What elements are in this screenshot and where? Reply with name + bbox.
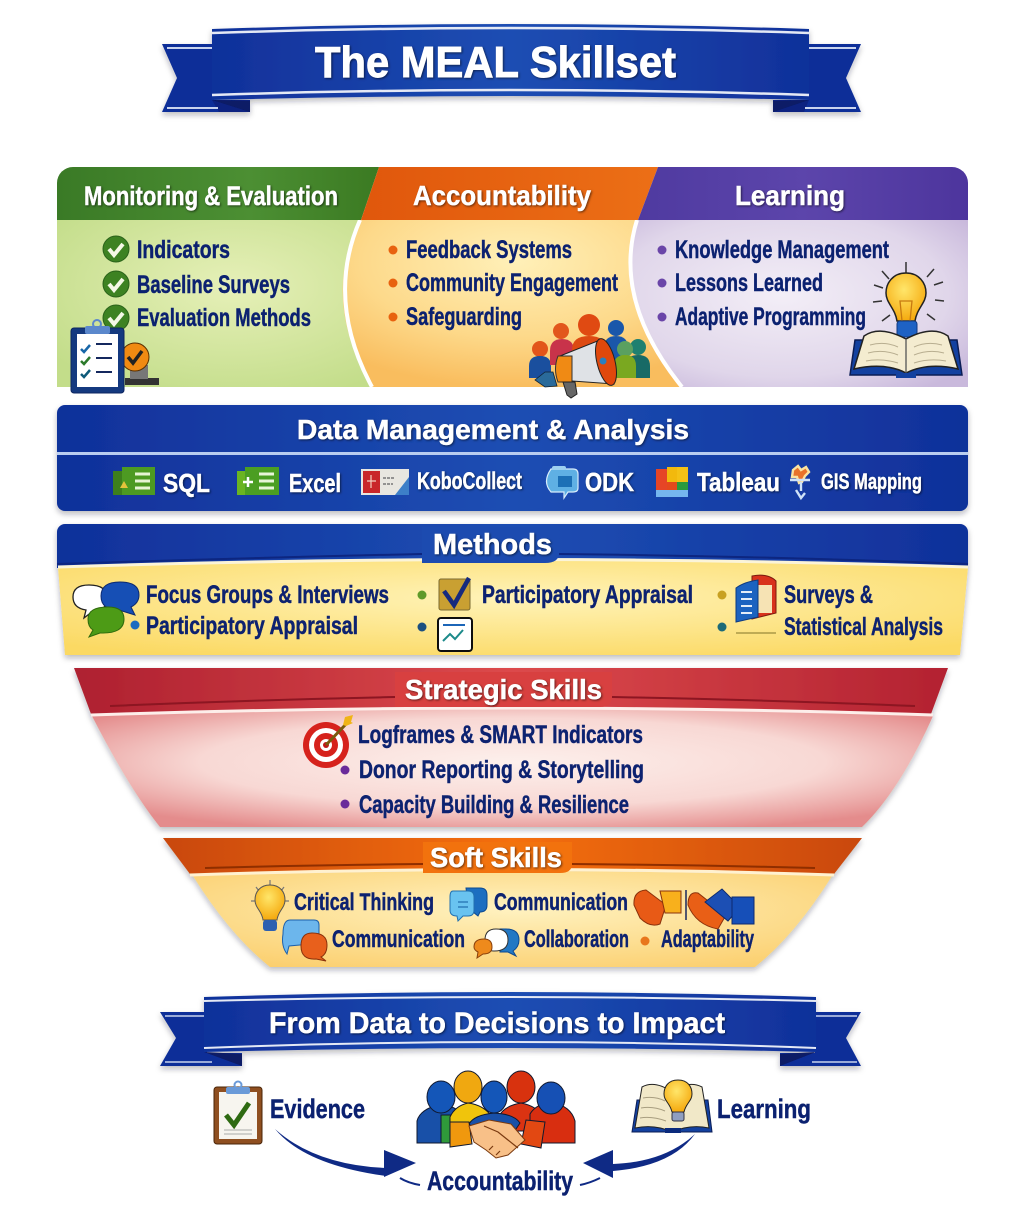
list: soft skills row two: Adaptability (661, 926, 754, 953)
list: soft skills row one: Communication (494, 889, 628, 916)
icon: Tableau blocks (656, 467, 688, 497)
list: soft skills row two (332, 926, 754, 953)
list: methods left: Participatory Appraisal (146, 612, 358, 640)
list: strategic skills: Capacity Building & Resilience (359, 791, 629, 819)
list: methods middle: Participatory Appraisal (482, 581, 693, 609)
list: strategic skills: Donor Reporting & Storytelling (359, 756, 644, 784)
icon: comment bubbles (282, 920, 327, 961)
icon: checkmark tile (439, 578, 470, 610)
icon: evidence clipboard (214, 1082, 262, 1144)
icon: statistics ledger (736, 575, 776, 633)
heading: Learning: Learning (735, 180, 845, 211)
icon: ODK speech case (546, 466, 578, 498)
label: GIS Mapping: GIS Mapping (821, 469, 922, 494)
label: KoboCollect: KoboCollect (417, 468, 522, 495)
icon: light bulb over open book (850, 262, 962, 378)
heading tab: Methods: Methods (433, 529, 552, 561)
icon: crowd with megaphone (529, 314, 650, 398)
icon: book and bulb (632, 1080, 712, 1133)
label: Learning: Learning (717, 1094, 811, 1124)
list: methods right (718, 581, 943, 641)
header: green (57, 167, 379, 220)
banner right tail (773, 44, 861, 112)
list: monitoring items: Indicators (137, 236, 230, 264)
icon: blue and orange handshake (686, 889, 754, 929)
list: learning items (658, 236, 889, 331)
label: ODK: ODK (585, 467, 634, 497)
list: methods middle (418, 581, 693, 632)
header: orange (361, 167, 658, 220)
list: soft skills row one (294, 889, 628, 916)
title banner (162, 24, 861, 112)
panel: MEAL pillars (57, 167, 968, 398)
list: strategic skills (340, 721, 644, 819)
banner main ribbon (212, 24, 809, 100)
icon: target with arrow (303, 715, 353, 768)
icon: blue chat bubbles (450, 888, 487, 921)
arrow: evidence to accountability (275, 1129, 416, 1177)
icon: GIS map pin (790, 466, 810, 498)
label: Tableau: Tableau (697, 467, 780, 497)
list: learning items: Knowledge Management (675, 236, 889, 264)
list: soft skills row two: Collaboration (524, 926, 629, 953)
list: accountability items (388, 236, 618, 331)
icon: people shaking hands (417, 1071, 575, 1158)
heading: Data Management & Analysis: Data Management & Analysis (297, 414, 689, 445)
closing banner (160, 992, 861, 1066)
list: monitoring items: Evaluation Methods (137, 304, 311, 332)
icon: SQL sheet (113, 467, 155, 495)
list: accountability items: Community Engagement (406, 269, 618, 297)
heading tab: Strategic Skills: Strategic Skills (405, 674, 602, 705)
icon: clipboard checklist (71, 320, 159, 393)
list: soft skills row one: Critical Thinking (294, 889, 434, 916)
label: Evidence: Evidence (270, 1094, 365, 1124)
list: accountability items: Feedback Systems (406, 236, 572, 264)
list: methods left: Focus Groups & Interviews (146, 581, 389, 609)
list: accountability items: Safeguarding (406, 303, 522, 331)
list: strategic skills: Logframes & SMART Indicators (358, 721, 643, 749)
closing banner text: From Data to Decisions to Impact (269, 1007, 725, 1040)
list: learning items: Lessons Learned (675, 269, 823, 297)
list: monitoring items (103, 236, 311, 332)
closing banner right tail (780, 1012, 861, 1066)
heading: Accountability: Accountability (413, 180, 591, 211)
icon: Excel sheet (237, 467, 279, 495)
list: methods left (130, 581, 389, 640)
panel: strategic skills (74, 668, 948, 827)
header: purple (638, 167, 968, 220)
banner left tail (162, 44, 250, 112)
label: Accountability: Accountability (427, 1166, 573, 1196)
list: learning items: Adaptive Programming (675, 303, 866, 331)
title text: The MEAL Skillset (315, 38, 676, 87)
list: soft skills row two: Communication (332, 926, 465, 953)
icon: chart tile (438, 618, 472, 651)
closing banner left tail (160, 1012, 242, 1066)
icon: KoboCollect form (361, 469, 409, 495)
list: monitoring items: Baseline Surveys (137, 271, 290, 299)
panel: soft skills (163, 838, 862, 967)
column body backgrounds (57, 220, 968, 387)
panel: data management (57, 405, 968, 511)
heading: Monitoring & Evaluation: Monitoring & Evaluation (84, 181, 338, 211)
icon: collaboration bubbles (474, 929, 519, 958)
label: SQL: SQL (163, 468, 210, 498)
icon: orange handshake (634, 890, 681, 925)
panel: methods (57, 524, 968, 655)
list: methods right: Statistical Analysis (784, 613, 943, 641)
arrow: learning to accountability (583, 1134, 695, 1178)
closing banner ribbon (204, 992, 816, 1052)
label: Excel: Excel (289, 468, 341, 498)
icon: idea bulb (251, 880, 289, 931)
icon: speech bubbles (73, 582, 139, 637)
heading tab: Soft Skills: Soft Skills (430, 842, 562, 873)
list: methods right: Surveys & (784, 581, 873, 609)
